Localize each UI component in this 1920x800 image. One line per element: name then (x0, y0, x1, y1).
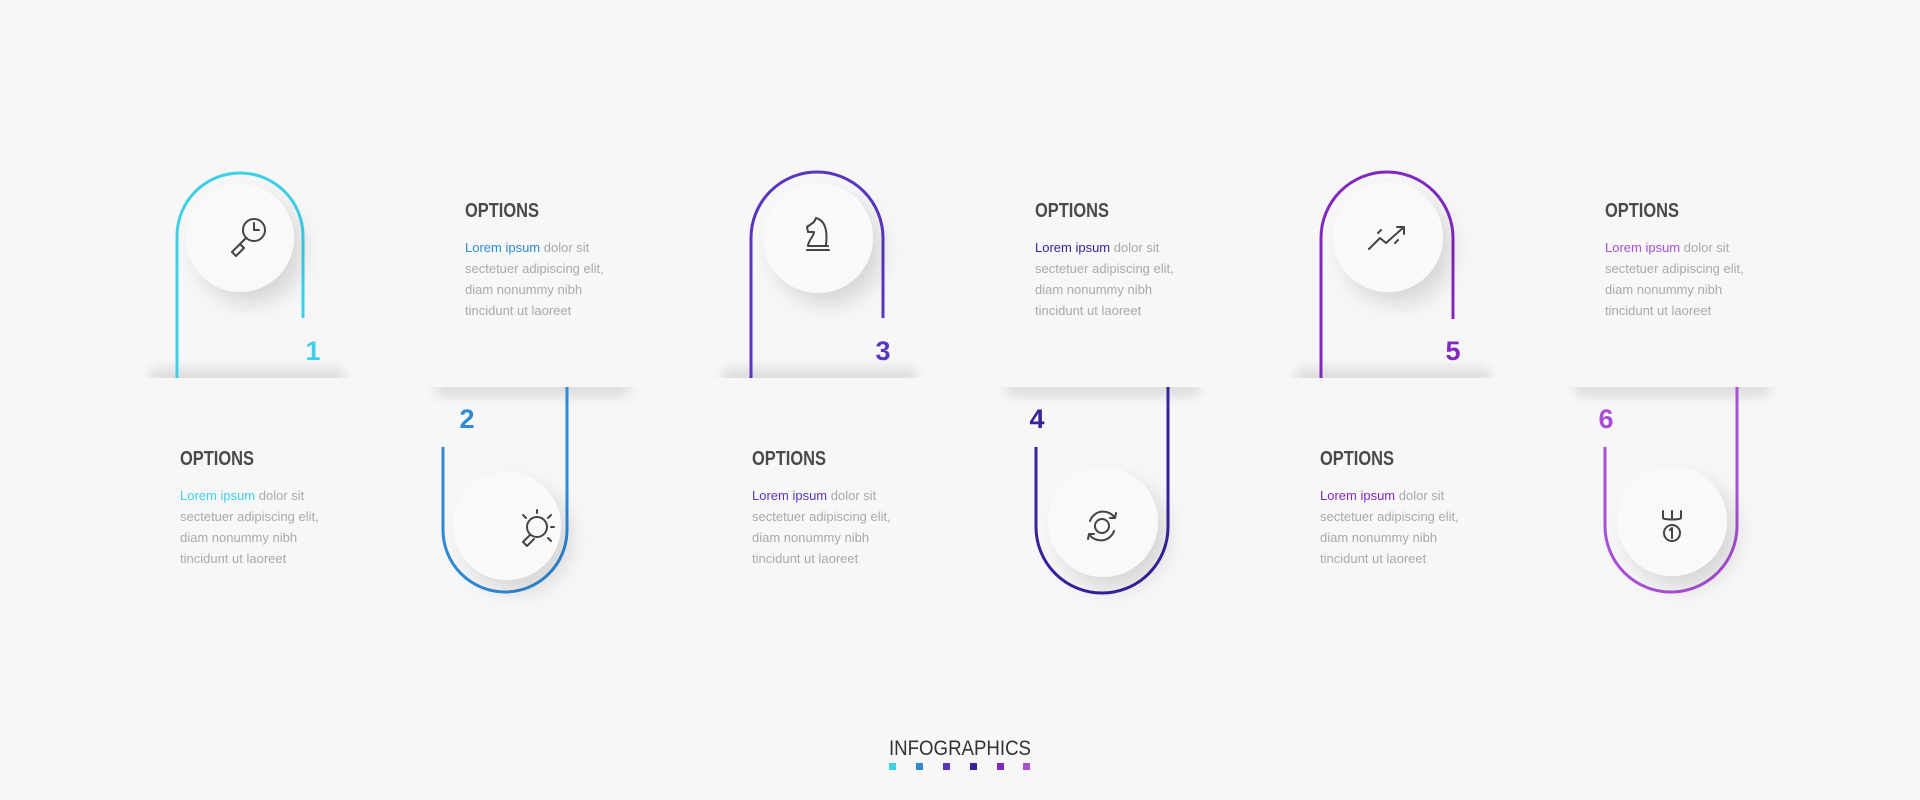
text 3: OPTIONS (752, 448, 826, 470)
text 5: tincidunt ut laoreet (1320, 551, 1427, 566)
text 2 (465, 200, 604, 318)
text 4: OPTIONS (1035, 200, 1109, 222)
text 4: diam nonummy nibh (1035, 282, 1152, 297)
step 4 (1029, 387, 1168, 593)
text 4: sectetuer adipiscing elit, (1035, 261, 1174, 276)
text 2: sectetuer adipiscing elit, (465, 261, 604, 276)
text 5: Lorem ipsum dolor sit (1320, 488, 1445, 503)
footer title (889, 737, 1031, 770)
icon: trending (1369, 227, 1404, 249)
text 2: diam nonummy nibh (465, 282, 582, 297)
text 4 (1035, 200, 1174, 318)
text 6: sectetuer adipiscing elit, (1605, 261, 1744, 276)
text 5: OPTIONS (1320, 448, 1394, 470)
text 2: OPTIONS (465, 200, 539, 222)
step 6 (1598, 387, 1737, 592)
text 6: OPTIONS (1605, 200, 1679, 222)
text 4: Lorem ipsum dolor sit (1035, 240, 1160, 255)
icon: medal (1663, 511, 1681, 541)
text 2: Lorem ipsum dolor sit (465, 240, 590, 255)
step 2 (443, 387, 567, 592)
text 1: Lorem ipsum dolor sit (180, 488, 305, 503)
text 3: tincidunt ut laoreet (752, 551, 859, 566)
step 3 (751, 172, 891, 378)
covers to make sharp plate edges (110, 360, 1805, 398)
text 5 (1320, 448, 1459, 566)
text 4: tincidunt ut laoreet (1035, 303, 1142, 318)
text 3: Lorem ipsum dolor sit (752, 488, 877, 503)
text card shadows (435, 377, 1770, 397)
step 1 (177, 173, 321, 378)
icon: search clock (232, 219, 265, 256)
text 3: sectetuer adipiscing elit, (752, 509, 891, 524)
text 6: diam nonummy nibh (1605, 282, 1722, 297)
text 2: tincidunt ut laoreet (465, 303, 572, 318)
number 1: 1 (305, 336, 321, 366)
text 6: tincidunt ut laoreet (1605, 303, 1712, 318)
number 3: 3 (875, 336, 891, 366)
text 5: diam nonummy nibh (1320, 530, 1437, 545)
text 1 (180, 448, 319, 566)
text 6: Lorem ipsum dolor sit (1605, 240, 1730, 255)
text 1: OPTIONS (180, 448, 254, 470)
number 4: 4 (1029, 404, 1045, 434)
number 5: 5 (1445, 336, 1461, 366)
step 5 (1321, 172, 1461, 378)
footer title: INFOGRAPHICS (889, 737, 1031, 760)
text 3 (752, 448, 891, 566)
plate shadows: top items (150, 368, 1490, 388)
text 1: sectetuer adipiscing elit, (180, 509, 319, 524)
number 6: 6 (1598, 404, 1614, 434)
icon: refresh (1088, 512, 1116, 540)
icon: bulb (523, 510, 554, 546)
number 2: 2 (459, 404, 475, 434)
text 1: diam nonummy nibh (180, 530, 297, 545)
icon: chess knight (807, 218, 829, 250)
text 5: sectetuer adipiscing elit, (1320, 509, 1459, 524)
legend squares (889, 763, 1030, 770)
text 1: tincidunt ut laoreet (180, 551, 287, 566)
text 6 (1605, 200, 1744, 318)
text 3: diam nonummy nibh (752, 530, 869, 545)
